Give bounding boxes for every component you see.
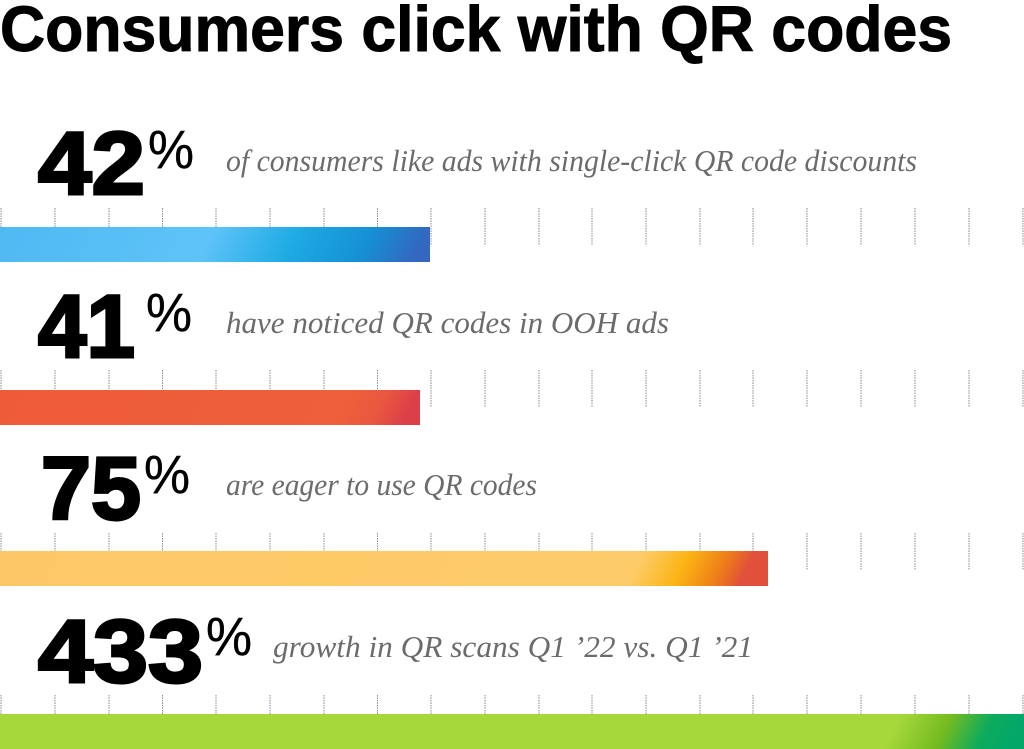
number: 42: 42 bbox=[38, 113, 145, 213]
caption: of consumers like ads with single-click QR code discounts bbox=[226, 143, 917, 178]
number: 433: 433 bbox=[38, 601, 203, 701]
number: 75: 75 bbox=[41, 438, 141, 538]
percent sign: % bbox=[206, 607, 252, 667]
number: 41: 41 bbox=[38, 276, 135, 376]
caption: are eager to use QR codes bbox=[226, 467, 537, 502]
percent sign: % bbox=[144, 445, 190, 505]
panel: 42 percent row bbox=[0, 113, 1023, 262]
bar: 41 percent bbox=[0, 390, 420, 425]
caption: growth in QR scans Q1 ’22 vs. Q1 ’21 bbox=[273, 629, 753, 664]
panel: 41 percent row bbox=[0, 276, 1023, 425]
panel: 75 percent row bbox=[0, 438, 1023, 586]
bar: 75 percent bbox=[0, 551, 768, 586]
bar: 42 percent bbox=[0, 227, 430, 262]
bar: 433 percent bbox=[0, 714, 1024, 749]
caption: have noticed QR codes in OOH ads bbox=[226, 305, 669, 340]
panel: 433 percent row bbox=[0, 601, 1024, 749]
percent sign: % bbox=[148, 120, 194, 180]
percent sign: % bbox=[146, 283, 192, 343]
